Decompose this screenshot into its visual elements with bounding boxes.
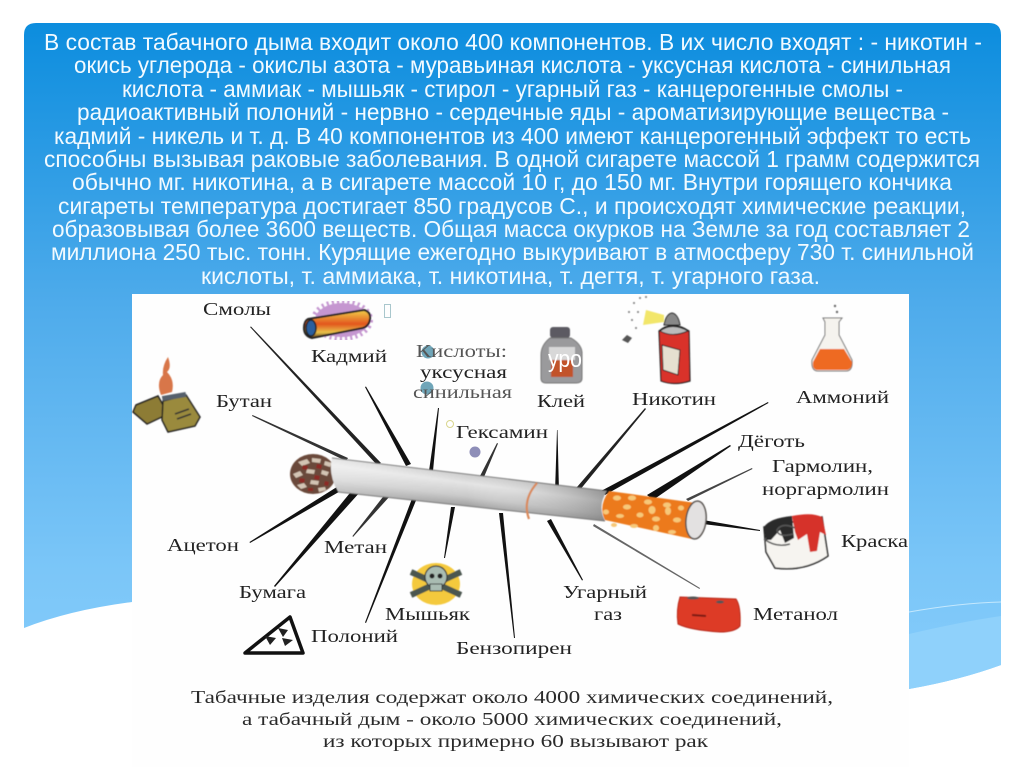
heading text block: окись углерода - окислы азота - муравьиная кислота - уксусная кислота - синильная (74, 52, 951, 78)
heading text block (44, 29, 982, 289)
icon: paint can (764, 514, 828, 569)
labels: Гексамин (456, 422, 548, 442)
filter (602, 491, 696, 539)
labels: Аммоний (796, 387, 889, 407)
labels: Кадмий (311, 346, 387, 366)
cigarette (290, 454, 708, 540)
labels: Бензопирен (456, 638, 572, 658)
labels: Мышьяк (385, 604, 470, 624)
overlay text fragment: уро (548, 346, 582, 373)
icon: glue bottle (541, 327, 582, 383)
labels: Угарный (563, 582, 647, 602)
labels: Бутан (216, 391, 272, 411)
caption text block: Табачные изделия содержат около 4000 химических соединений, (191, 687, 833, 707)
caption text block (191, 687, 833, 751)
labels: Метан (324, 537, 387, 557)
filter end (684, 500, 708, 540)
labels: Метанол (753, 604, 838, 624)
labels: Гармолин, (772, 456, 873, 476)
labels: синильная (413, 382, 512, 402)
pointer lines (250, 326, 768, 638)
caption text block: из которых примерно 60 вызывают рак (323, 731, 708, 751)
labels: Дёготь (738, 431, 805, 451)
icon: skull and bones (411, 563, 461, 605)
diagram image panel (132, 294, 909, 767)
icon: teal dots overlay (420, 346, 480, 458)
heading text block: радиоактивный полоний - нервно - сердечные яды - ароматизирующие вещества - (77, 99, 949, 125)
labels: Краска (841, 531, 908, 551)
labels: уксусная (420, 362, 507, 382)
heading text block: В состав табачного дыма входит около 400 компонентов. В их число входят : - никотин - (44, 29, 982, 55)
heading text block: образовывая более 3600 веществ. Общая масса окурков на Земле за год составляет 2 (52, 216, 970, 242)
labels: Кислоты: (416, 341, 507, 361)
tobacco tip (290, 454, 336, 494)
heading text block: способны вызывая раковые заболевания. В одной сигарете массой 1 грамм содержится (44, 146, 980, 172)
labels: Бумага (239, 582, 306, 602)
icon: lighter (133, 357, 200, 432)
icon: empty glyph box (384, 304, 390, 318)
labels (167, 299, 908, 658)
heading text block: миллиона 250 тыс. тонн. Курящие ежегодно выкуривают в атмосферу 730 т. синильной (51, 239, 974, 265)
icon: spray can (622, 296, 690, 384)
labels: Клей (537, 391, 585, 411)
icon: flask (812, 305, 852, 371)
icon: jerry can (677, 596, 740, 632)
heading text block: кислоты, т. аммиака, т. никотина, т. дегтя, т. угарного газа. (201, 263, 820, 289)
heading text block: кислота - аммиак - мышьяк - стирол - угарный газ - канцерогенные смолы - (122, 76, 903, 102)
labels: Ацетон (167, 535, 239, 555)
paper body (331, 458, 607, 521)
heading text block: сигареты температура достигает 850 градусов С., и происходят химические реакции, (58, 193, 966, 219)
labels: Смолы (203, 299, 271, 319)
icon: cadmium battery (304, 303, 370, 338)
labels: Полоний (311, 626, 398, 646)
icon: radiation triangle (245, 617, 303, 653)
labels: норгармолин (762, 479, 889, 499)
labels: газ (594, 604, 622, 624)
heading text block: обычно мг. никотина, а в сигарете массой 10 г, до 150 мг. Внутри горящего кончика (72, 169, 952, 195)
heading text block: кадмий - никель и т. д. В 40 компонентов из 400 имеют канцерогенный эффект то есть (54, 123, 971, 149)
paper band (527, 483, 537, 519)
caption text block: а табачный дым - около 5000 химических соединений, (242, 709, 782, 729)
labels: Никотин (632, 389, 716, 409)
